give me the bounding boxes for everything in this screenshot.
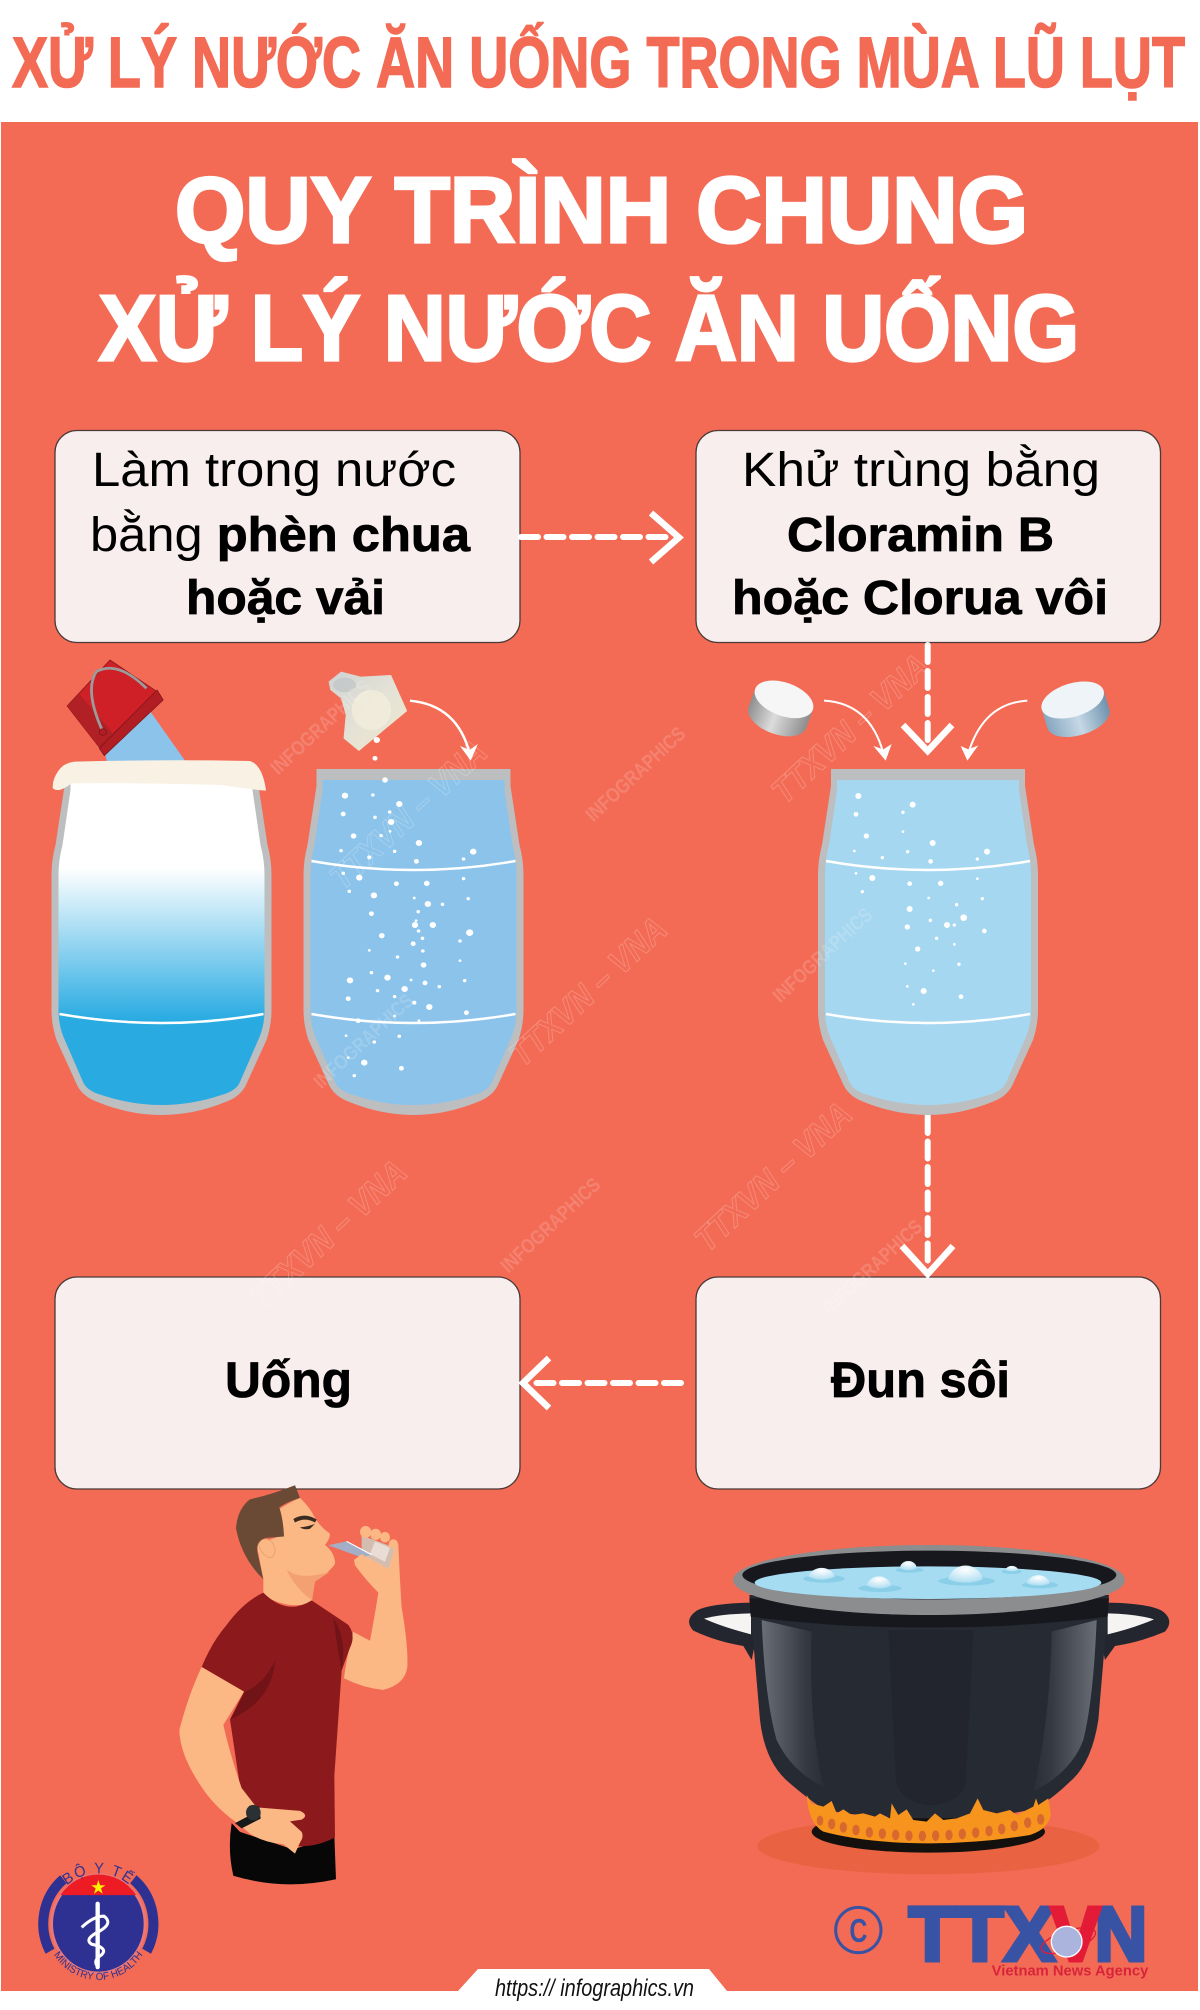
watermarks: INFOGRAPHICS — [582, 723, 690, 826]
icon: alum rock — [329, 672, 407, 751]
watch strap — [235, 1806, 261, 1828]
panel: step 1 clarify water — [55, 430, 520, 642]
watermarks: TTXVN – VNA — [687, 1095, 860, 1259]
arm on hip — [179, 1667, 305, 1854]
footer tab — [458, 1969, 727, 2002]
arrow: step 3 to step 4 — [523, 1358, 681, 1408]
panel: step 4 drink — [55, 1277, 520, 1489]
icon: boiling pot on stove — [689, 1545, 1169, 1874]
step 2 text: Cloramin B — [787, 509, 1054, 562]
icon: jar with alum — [304, 672, 524, 1115]
panel: step 3 boil — [696, 1277, 1160, 1489]
step 2 text — [732, 443, 1108, 625]
glass of water and hand — [328, 1526, 398, 1581]
hair — [236, 1485, 300, 1579]
step 1 text: hoặc vải — [186, 572, 385, 625]
pot handles — [689, 1603, 1169, 1660]
arrow: alum to jar — [410, 701, 478, 761]
panel: step 2 disinfect — [696, 430, 1160, 642]
neck and face — [257, 1498, 335, 1605]
watermarks: INFOGRAPHICS — [267, 676, 375, 779]
copyright mark: C — [849, 1913, 867, 1950]
main heading — [99, 158, 1079, 380]
pot rim — [733, 1545, 1125, 1615]
arrow: jar to step 3 — [902, 1116, 953, 1274]
t-shirt — [202, 1593, 353, 1846]
pants — [230, 1823, 336, 1884]
TTXVN wordmark: TTX — [909, 1891, 1055, 1977]
label: drink: Uống — [225, 1352, 352, 1408]
logo text bottom: MINISTRY OF HEALTH — [54, 1951, 142, 1980]
icon: cloth — [53, 760, 266, 791]
icon: settling jar with cloth — [52, 660, 272, 1115]
TTXVN wordmark: V — [1051, 1891, 1101, 1977]
icon: water stream — [105, 706, 185, 763]
logo text top: BỘ Y TẾ — [62, 1862, 136, 1885]
arrow: right tablet to jar — [961, 701, 1027, 761]
watermarks: TTXVN – VNA — [322, 733, 495, 897]
logo: ministry of health — [38, 1862, 158, 1980]
ear — [258, 1539, 275, 1558]
watermarks: INFOGRAPHICS — [819, 1216, 927, 1319]
brow and eye — [293, 1516, 317, 1529]
agency name: Vietnam News Agency — [992, 1964, 1149, 1980]
main heading: QUY TRÌNH CHUNG — [175, 158, 1028, 262]
boiling water — [755, 1561, 1101, 1599]
alum particles — [340, 737, 476, 1077]
arrow: step 1 to step 2 — [521, 513, 679, 562]
TTXVN wordmark: N — [1095, 1891, 1147, 1977]
step 1 text: Làm trong nước — [92, 444, 456, 497]
logo staff and snake — [82, 1904, 108, 1967]
watermarks: TTXVN – VNA — [764, 647, 937, 811]
illustration: man drinking water — [179, 1485, 407, 1884]
icon: right tablet — [1037, 675, 1114, 744]
watermarks — [242, 647, 937, 1319]
step 2 text: hoặc Clorua vôi — [732, 572, 1108, 625]
label: boil: Đun sôi — [831, 1352, 1010, 1408]
watermarks: TTXVN – VNA — [502, 910, 675, 1074]
copyright mark — [836, 1907, 881, 1953]
watch face — [246, 1805, 261, 1820]
dissolving particles — [853, 793, 990, 1005]
step 1 text — [90, 444, 470, 625]
burner base — [812, 1811, 1045, 1853]
arrow: left tablet to jar — [824, 701, 892, 761]
TTXVN wordmark — [909, 1891, 1147, 1977]
flames — [807, 1795, 1051, 1843]
step 1 text: bằng phèn chua — [90, 508, 470, 562]
step 2 text: Khử trùng bằng — [742, 443, 1100, 497]
raised arm — [344, 1544, 407, 1690]
logo star — [91, 1880, 105, 1894]
watermarks: INFOGRAPHICS — [497, 1174, 605, 1277]
arrow: step 2 into jar — [903, 645, 952, 751]
logo disk — [52, 1875, 145, 1973]
logo: TTXVN copyright — [836, 1891, 1149, 1980]
main heading: XỬ LÝ NƯỚC ĂN UỐNG — [99, 276, 1079, 380]
stove shadow — [757, 1818, 1099, 1874]
watermarks: TTXVN – VNA — [242, 1153, 415, 1317]
logo red band — [60, 1874, 136, 1895]
icon: jar with disinfectant tablets — [743, 673, 1114, 1115]
watermarks: INFOGRAPHICS — [769, 904, 877, 1007]
logo ring — [43, 1879, 153, 1951]
watermarks: INFOGRAPHICS — [310, 990, 418, 1093]
icon: red bucket — [67, 660, 163, 756]
pot body — [749, 1595, 1109, 1818]
globe — [1038, 1922, 1098, 1959]
icon: left tablet — [743, 673, 819, 744]
website url: https:// infographics.vn — [495, 1975, 694, 2002]
